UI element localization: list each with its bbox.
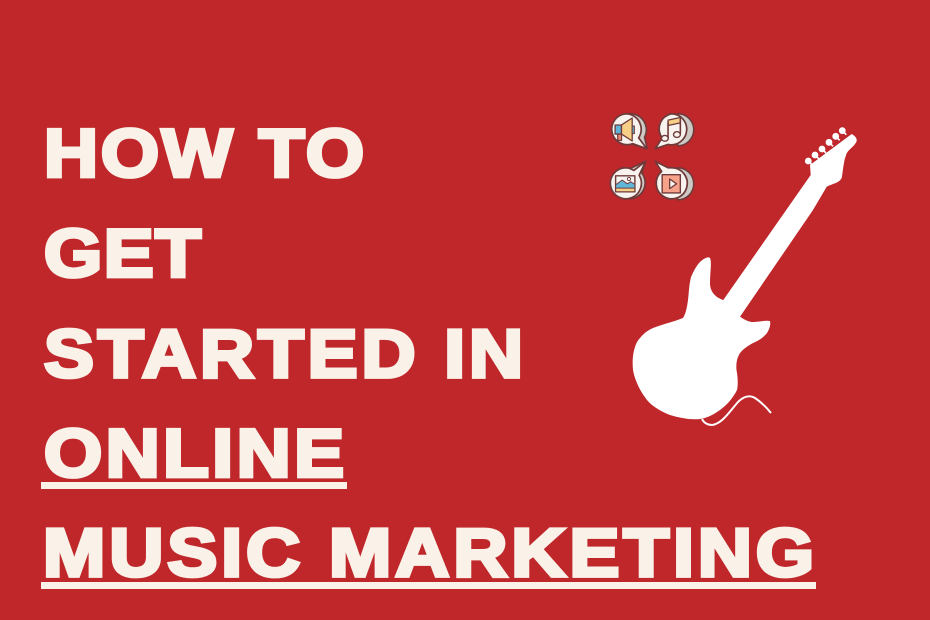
music marketing underline — [41, 582, 816, 589]
title — [41, 115, 816, 591]
icon: picture bubble — [610, 161, 646, 199]
icon group: media speech bubbles — [610, 114, 694, 200]
icon: music note bubble — [655, 114, 694, 149]
title line: how to: HOW TO — [44, 115, 364, 192]
title line: music marketing: MUSIC MARKETING — [43, 515, 814, 591]
icon: video play bubble — [655, 161, 694, 200]
title line: online: ONLINE — [44, 415, 344, 492]
guitar body and neck — [633, 134, 857, 419]
guitar cable — [702, 396, 771, 425]
icon: guitar silhouette — [633, 128, 857, 425]
title line: get: GET — [44, 215, 201, 292]
icon: megaphone bubble — [612, 114, 647, 149]
tuning pegs — [806, 128, 846, 165]
title line: started in: STARTED IN — [44, 316, 523, 392]
online underline — [41, 482, 347, 489]
